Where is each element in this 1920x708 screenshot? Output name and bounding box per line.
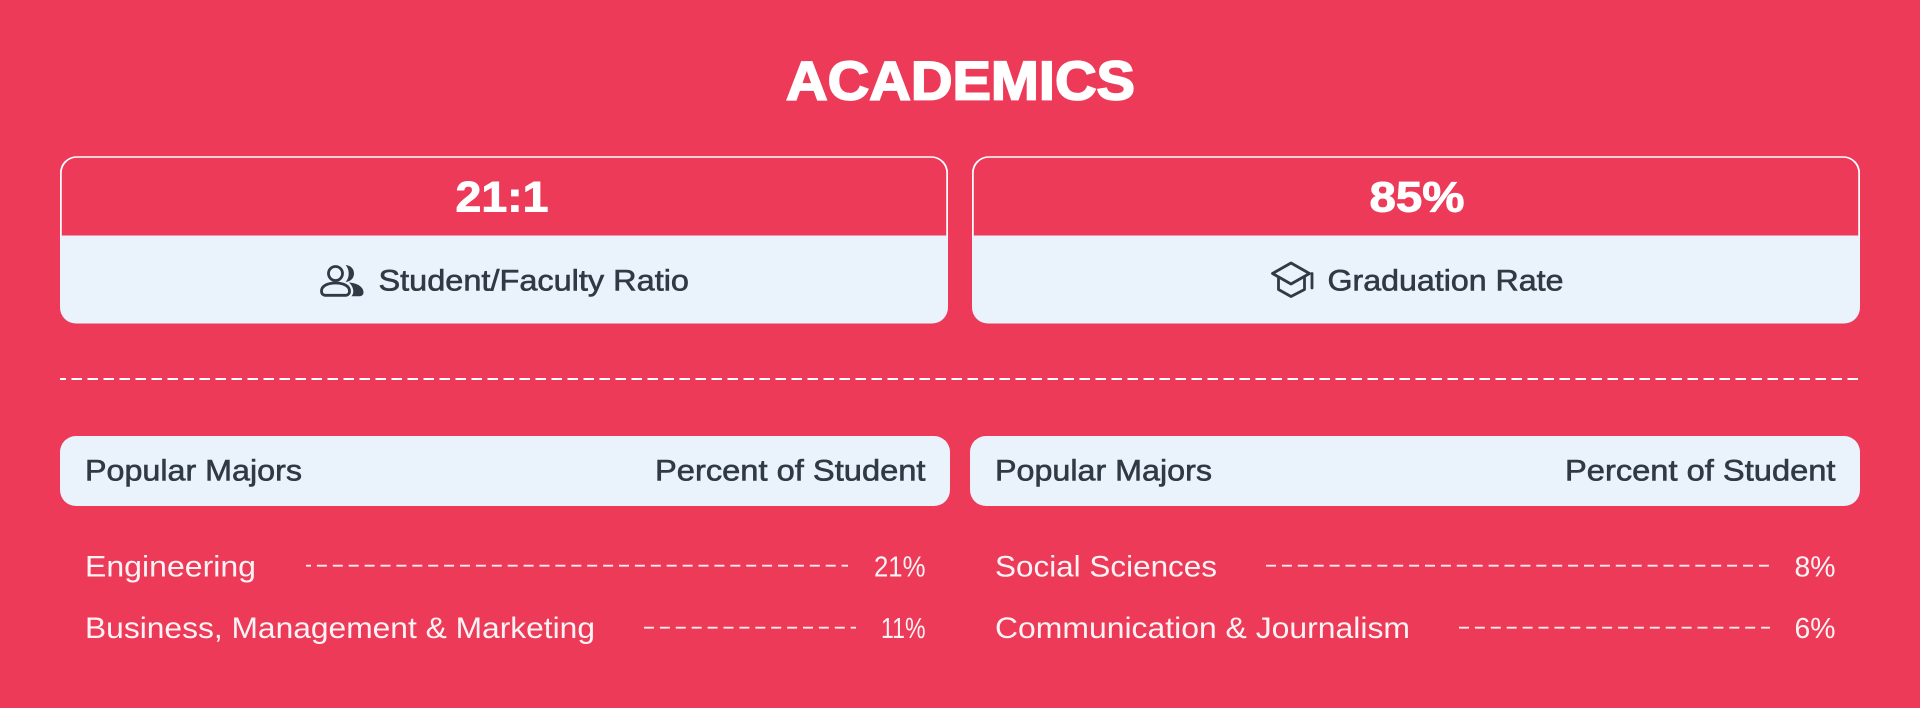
card header xyxy=(61,157,947,236)
card header xyxy=(973,157,1859,236)
row: business: 11% xyxy=(881,613,926,645)
title: ACADEMICS xyxy=(786,50,1135,112)
column heading: majors: Popular Majors xyxy=(995,454,1212,488)
table header xyxy=(970,436,1860,506)
column heading: majors: Popular Majors xyxy=(85,454,302,488)
graduation label: Graduation Rate xyxy=(1328,264,1564,298)
panel: student faculty ratio xyxy=(60,156,948,324)
icon: people xyxy=(322,265,364,296)
row: engineering: 21% xyxy=(874,552,926,584)
ratio label: Student/Faculty Ratio xyxy=(378,264,689,298)
row: social sciences: Social Sciences xyxy=(995,550,1217,584)
row: communication: 6% xyxy=(1794,613,1836,645)
icon: graduation cap xyxy=(1272,263,1312,296)
row: social sciences: 8% xyxy=(1794,552,1836,584)
panel: majors table right xyxy=(970,436,1860,645)
divider xyxy=(60,378,1860,380)
row: engineering xyxy=(85,550,926,584)
card background xyxy=(60,156,948,324)
row: social sciences xyxy=(995,550,1836,584)
card background xyxy=(972,156,1860,324)
panel: graduation rate xyxy=(972,156,1860,324)
row: communication xyxy=(995,612,1836,645)
row: business xyxy=(85,612,926,645)
row: engineering: Engineering xyxy=(85,550,256,584)
panel: majors table left xyxy=(60,436,950,645)
ratio value: 21:1 xyxy=(456,174,548,222)
table header xyxy=(60,436,950,506)
row: communication: Communication & Journalism xyxy=(995,612,1410,645)
graduation value: 85% xyxy=(1370,174,1464,222)
row: business: Business, Management & Marketing xyxy=(85,612,595,645)
column heading: percent: Percent of Student xyxy=(655,454,926,488)
column heading: percent: Percent of Student xyxy=(1565,454,1836,488)
